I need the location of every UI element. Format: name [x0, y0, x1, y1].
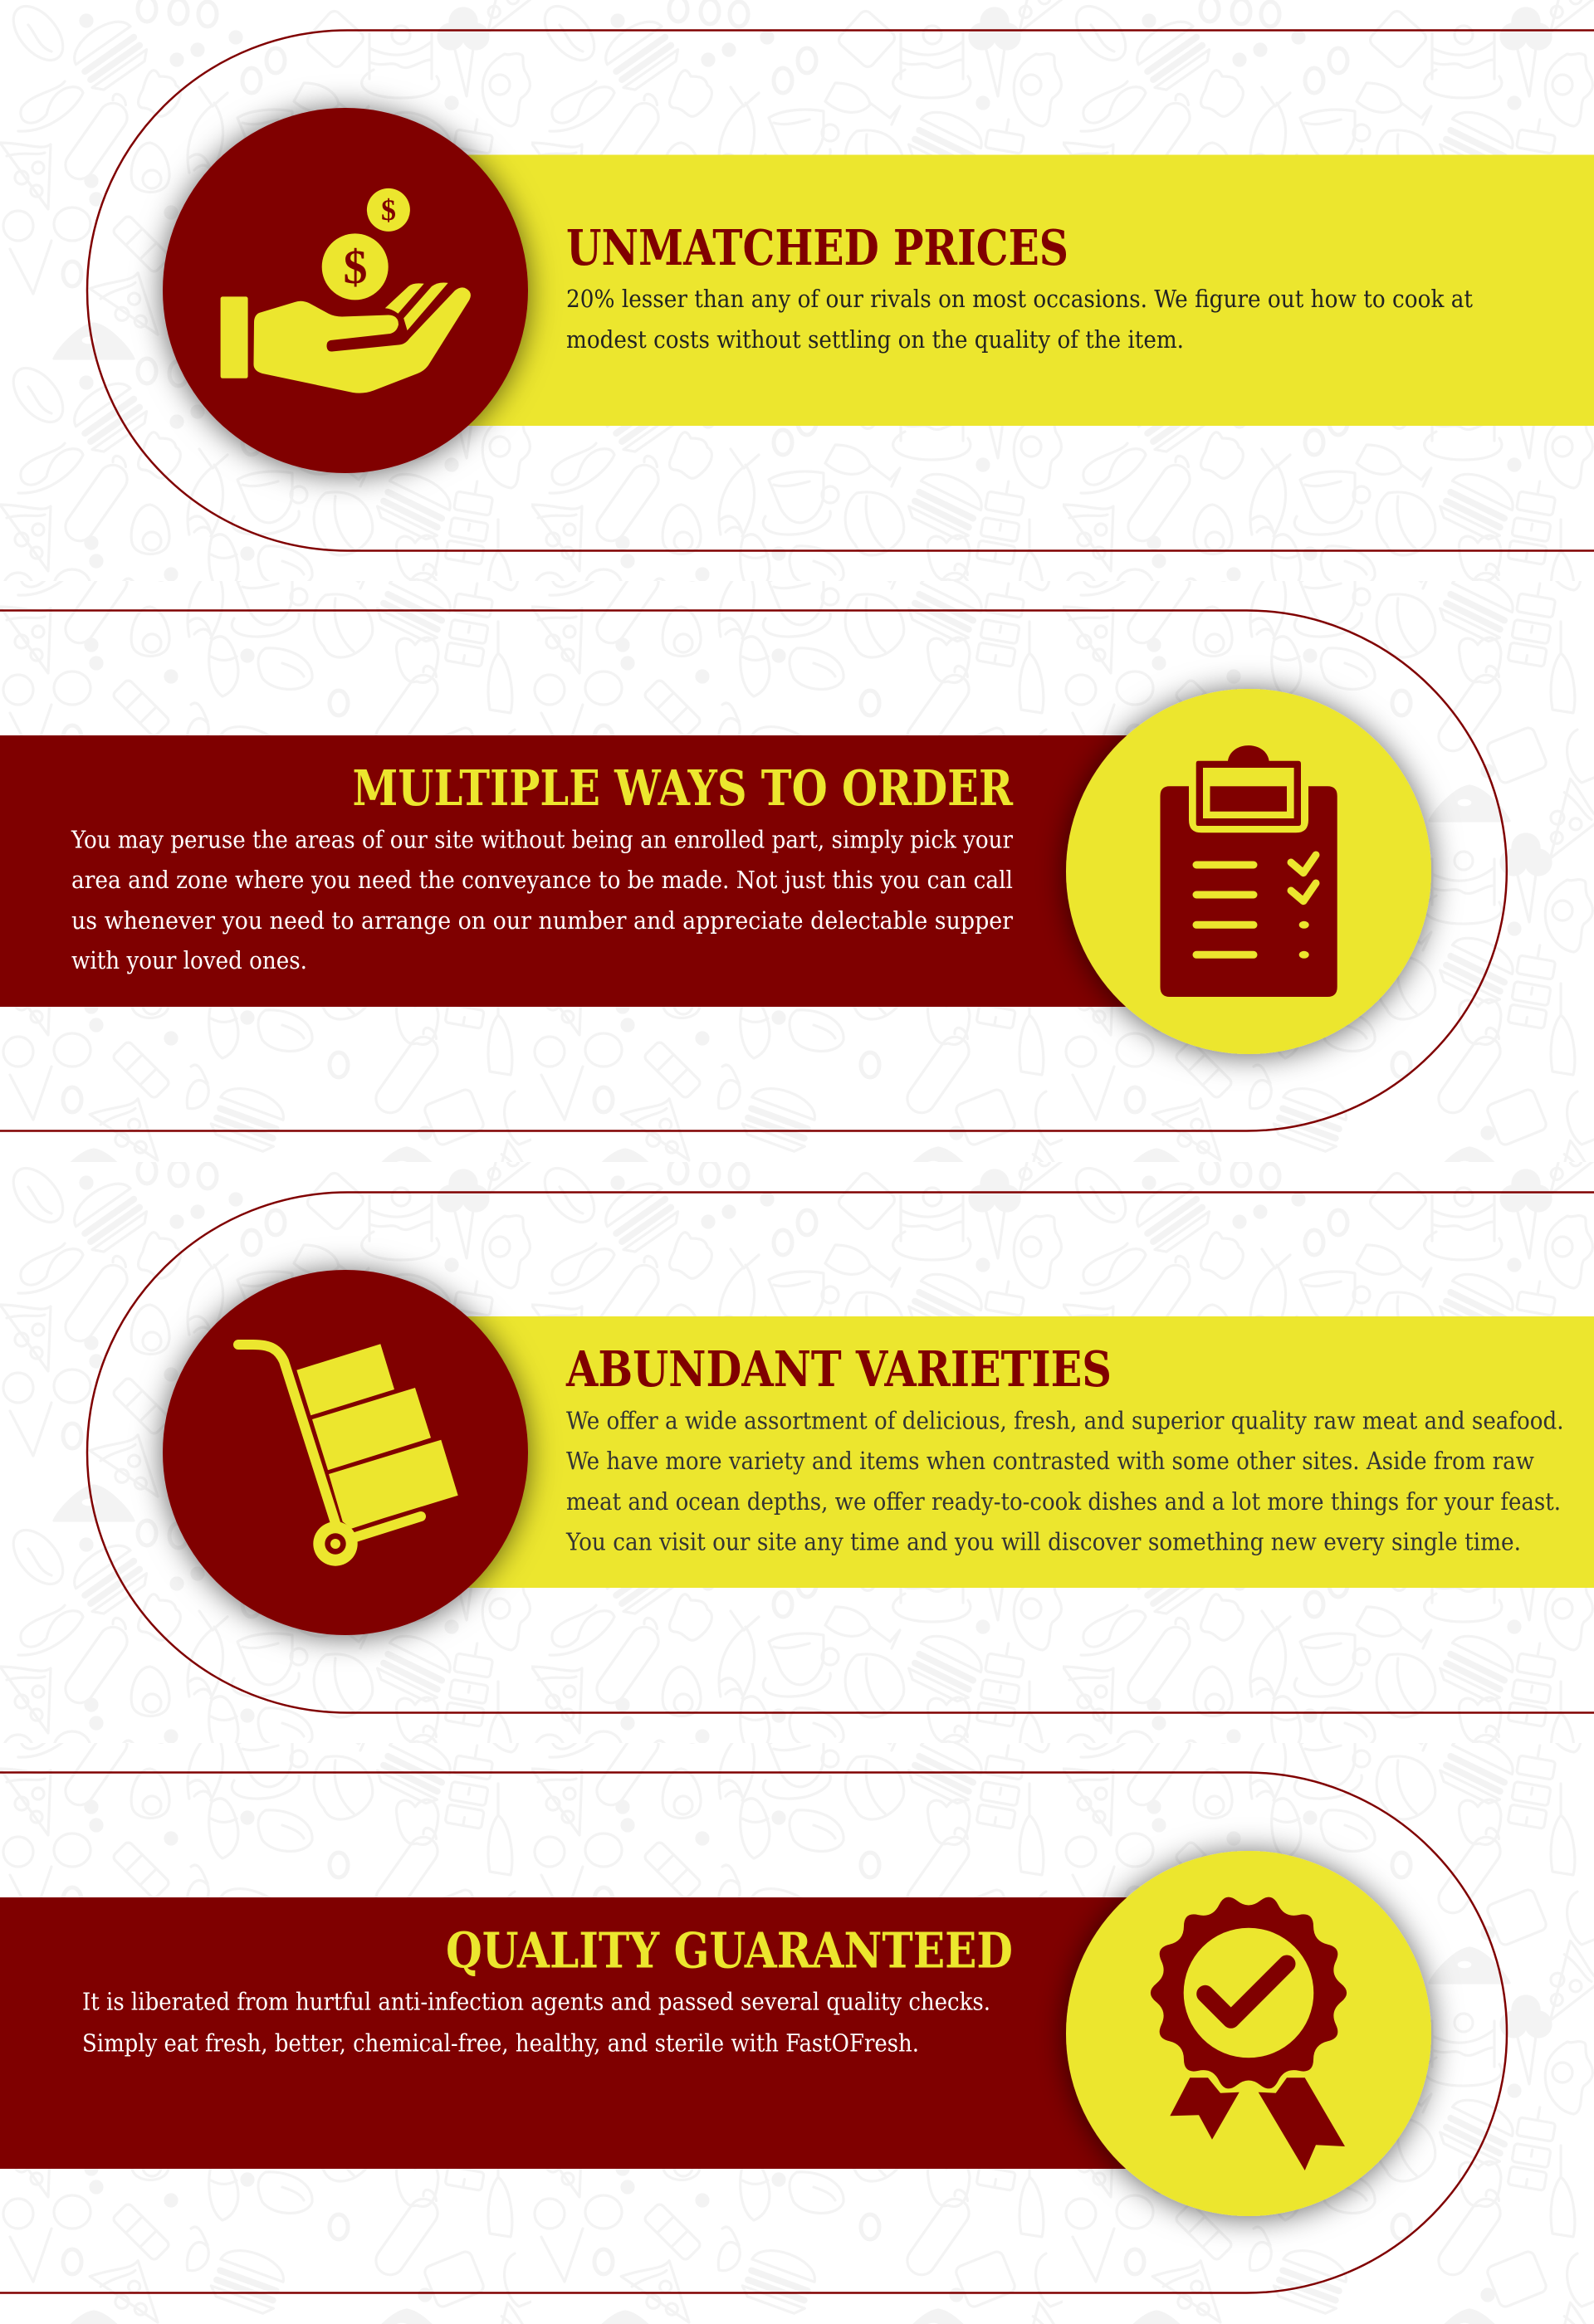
body text: Simply eat fresh, better, chemical-free, healthy, and sterile with FastOFresh.	[82, 2029, 919, 2058]
yellow band	[345, 1316, 1594, 1588]
body text: You may peruse the areas of our site without being an enrolled part, simply pick your	[71, 826, 1013, 854]
panel: multiple ways to order	[0, 611, 1507, 1130]
outline	[87, 30, 1594, 551]
icon: hand truck with boxes	[238, 1344, 458, 1566]
panel: abundant varieties	[87, 1192, 1594, 1713]
icon: clipboard checklist	[1161, 745, 1337, 997]
body text	[82, 1988, 990, 2058]
icon: hand with coins	[221, 188, 471, 393]
body text	[71, 826, 1013, 974]
icon: dollar signs: $	[381, 193, 396, 227]
icon circle	[163, 108, 528, 473]
panel: quality guaranteed	[0, 1773, 1507, 2292]
icon circle	[163, 1270, 528, 1635]
icon circle	[1066, 689, 1431, 1054]
maroon band	[0, 735, 1249, 1007]
icon: award ribbon with check	[1151, 1897, 1347, 2170]
body text: It is liberated from hurtful anti-infection agents and passed several quality checks.	[82, 1988, 990, 2016]
icon: dollar signs	[344, 193, 396, 294]
body text: modest costs without settling on the quality of the item.	[566, 325, 1184, 354]
maroon band	[0, 1897, 1249, 2169]
outline	[87, 1192, 1594, 1713]
heading: QUALITY GUARANTEED	[446, 1922, 1013, 1979]
body text: area and zone where you need the conveyance to be made. Not just this you can call	[71, 866, 1013, 894]
outline	[0, 611, 1507, 1130]
body text: us whenever you need to arrange on our number and appreciate delectable supper	[71, 906, 1013, 935]
body text	[566, 285, 1473, 354]
body text	[565, 1407, 1564, 1556]
heading: ABUNDANT VARIETIES	[565, 1340, 1112, 1398]
heading: UNMATCHED PRICES	[566, 219, 1068, 276]
icon: dollar signs: $	[344, 240, 367, 294]
icon circle	[1066, 1851, 1431, 2216]
body text: You can visit our site any time and you will discover something new every single time.	[565, 1528, 1521, 1556]
heading: MULTIPLE WAYS TO ORDER	[352, 759, 1014, 817]
panel: unmatched prices	[87, 30, 1594, 551]
outline	[0, 1773, 1507, 2292]
body text: 20% lesser than any of our rivals on most occasions. We figure out how to cook at	[566, 285, 1473, 313]
yellow band	[345, 154, 1594, 426]
body text: with your loved ones.	[71, 946, 307, 974]
